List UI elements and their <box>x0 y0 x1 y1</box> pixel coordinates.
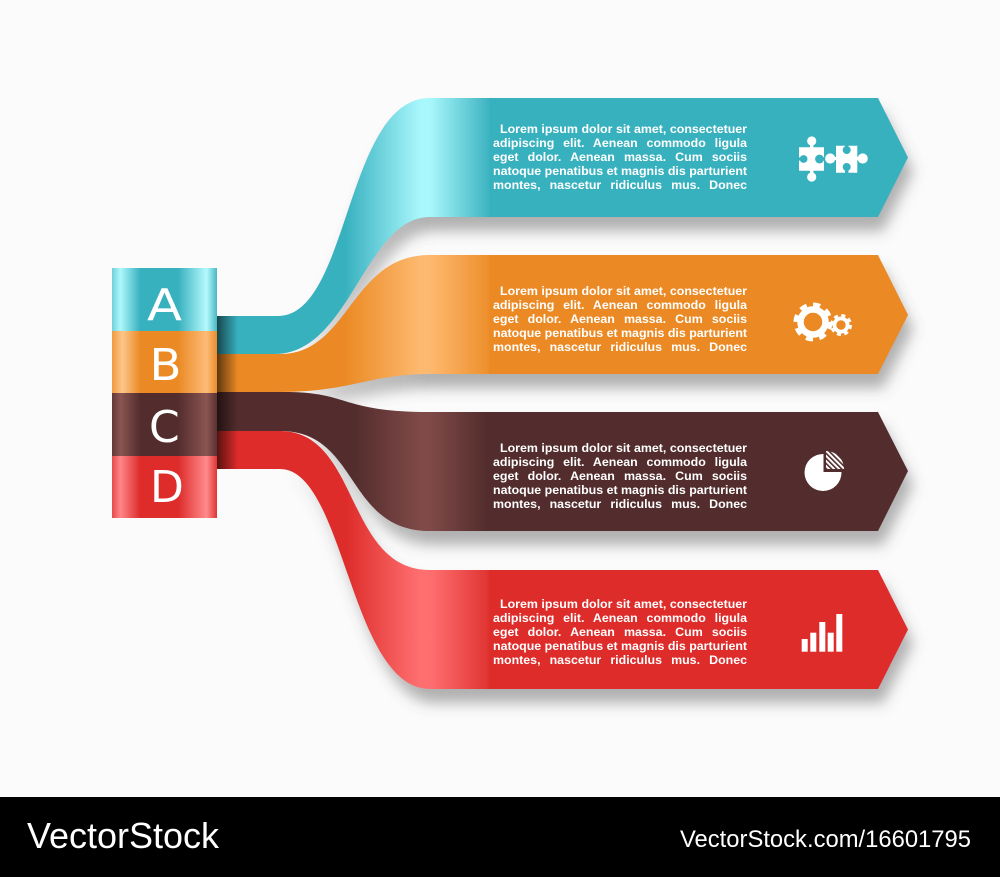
segment B: B <box>150 340 182 391</box>
ribbon arrow A <box>217 98 908 354</box>
segment B <box>112 331 217 393</box>
segment C: C <box>149 402 180 453</box>
segment A <box>112 268 217 331</box>
ribbon arrow D <box>217 431 908 689</box>
icon: gears <box>796 305 850 339</box>
text block B: Lorem ipsum dolor sit amet, consectetuer <box>500 284 747 298</box>
icon: puzzle pieces <box>798 136 868 182</box>
text block A: montes, nascetur ridiculus mus. Donec <box>493 178 747 192</box>
text block D: natoque penatibus et magnis dis parturient <box>493 639 747 653</box>
text block C: adipiscing elit. Aenean commodo ligula <box>493 455 747 469</box>
panel: ribbon A <box>217 98 908 354</box>
text block A: eget dolor. Aenean massa. Cum sociis <box>493 150 747 164</box>
text block B: montes, nascetur ridiculus mus. Donec <box>493 340 747 354</box>
text block B: adipiscing elit. Aenean commodo ligula <box>493 298 747 312</box>
footer brand: VectorStock <box>27 815 220 856</box>
icon: pie chart <box>805 451 844 491</box>
text block C: natoque penatibus et magnis dis parturient <box>493 483 747 497</box>
segment D: D <box>150 462 184 513</box>
text block D: eget dolor. Aenean massa. Cum sociis <box>493 625 747 639</box>
cylinder shadow where ribbons emerge <box>217 316 238 469</box>
ribbon arrow C <box>217 392 908 531</box>
text block A <box>493 122 749 194</box>
panel: ribbon C <box>217 392 908 531</box>
panel: ribbon B <box>217 255 908 392</box>
text block C: montes, nascetur ridiculus mus. Donec <box>493 497 747 511</box>
text block B: natoque penatibus et magnis dis parturient <box>493 326 747 340</box>
ribbon arrow B <box>217 255 908 392</box>
text block C: Lorem ipsum dolor sit amet, consectetuer <box>500 441 747 455</box>
text block A: adipiscing elit. Aenean commodo ligula <box>493 136 747 150</box>
text block D: Lorem ipsum dolor sit amet, consectetuer <box>500 597 747 611</box>
text block D <box>493 597 749 669</box>
segment D <box>112 456 217 518</box>
text block C: eget dolor. Aenean massa. Cum sociis <box>493 469 747 483</box>
text block D: montes, nascetur ridiculus mus. Donec <box>493 653 747 667</box>
text block B <box>493 284 749 356</box>
text block B: eget dolor. Aenean massa. Cum sociis <box>493 312 747 326</box>
panel: ABCD cylinder <box>112 268 217 518</box>
icon: bar chart <box>802 614 842 652</box>
ribbon drop shadows <box>280 112 913 703</box>
text block C <box>493 441 749 513</box>
panel: ribbon D <box>217 431 908 689</box>
text block A: Lorem ipsum dolor sit amet, consectetuer <box>500 122 747 136</box>
text block D: adipiscing elit. Aenean commodo ligula <box>493 611 747 625</box>
footer url: VectorStock.com/16601795 <box>680 826 971 853</box>
segment C <box>112 393 217 456</box>
text block A: natoque penatibus et magnis dis parturient <box>493 164 747 178</box>
footer bar <box>0 797 1000 877</box>
segment A: A <box>147 280 182 331</box>
